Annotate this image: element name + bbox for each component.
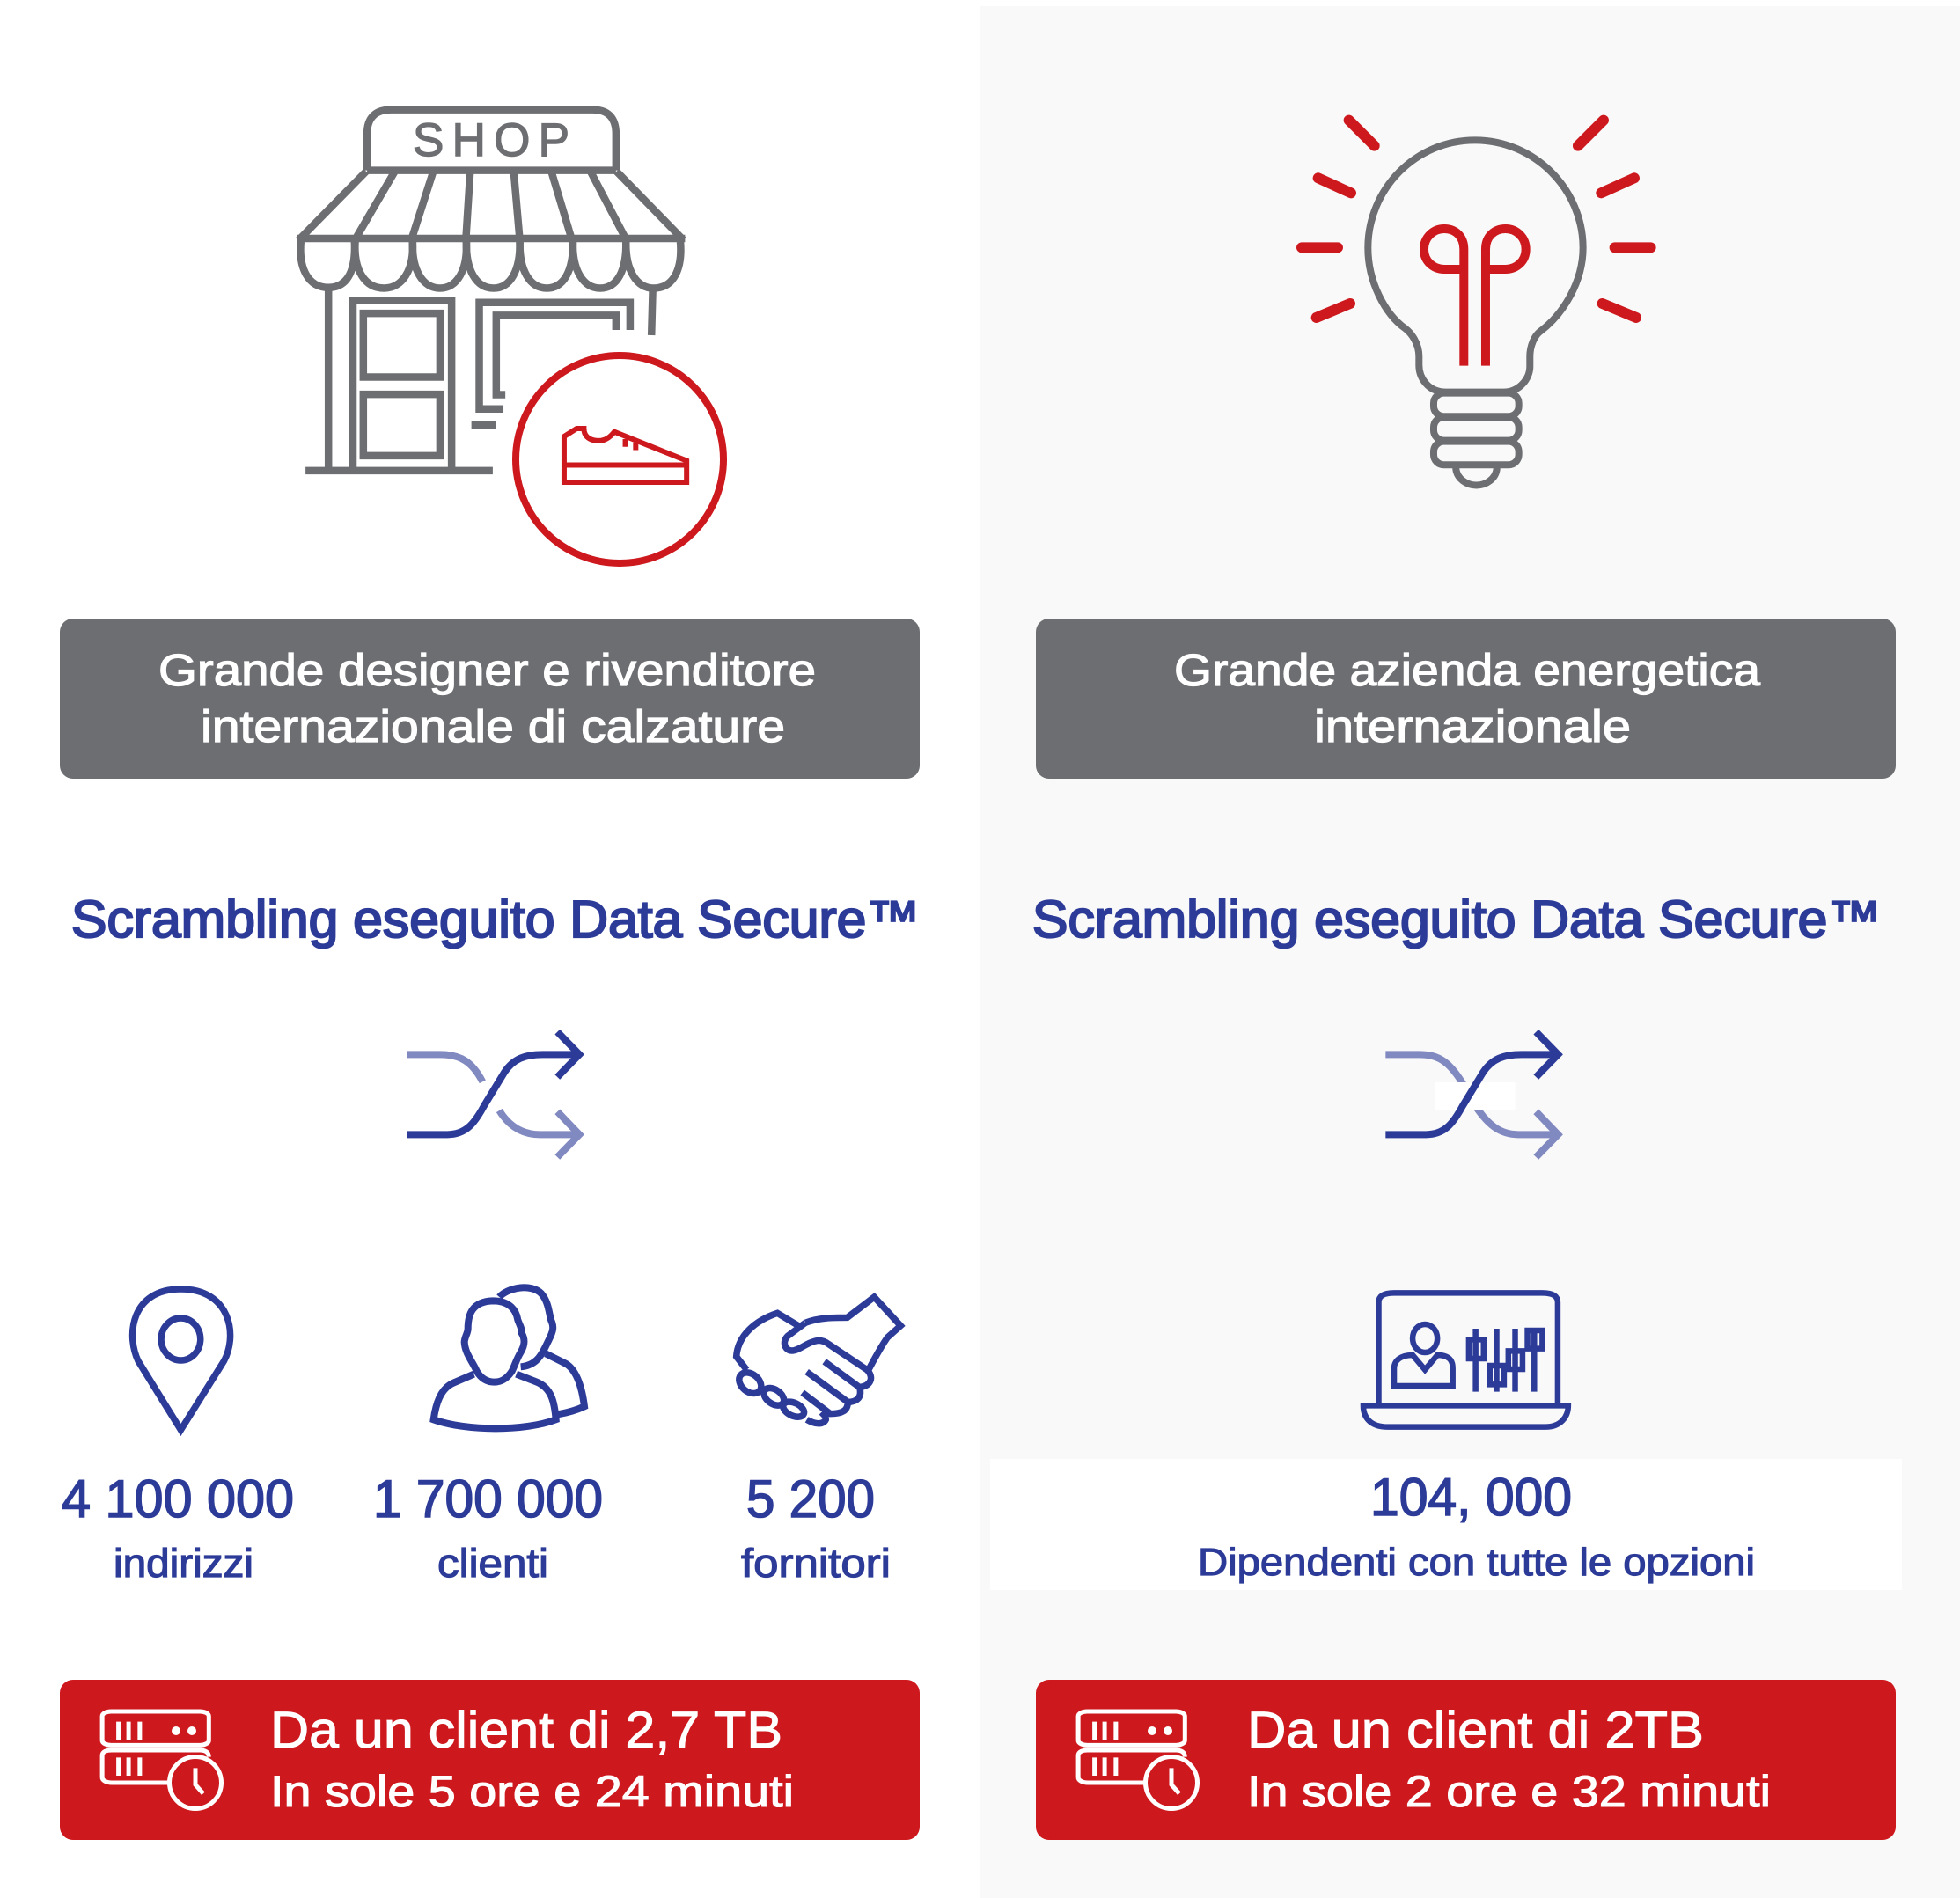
- stat: customers: 1 700 000: [373, 1469, 603, 1528]
- stat panel: employees: [990, 1459, 1902, 1590]
- stat: addresses: 4 100 000: [62, 1469, 294, 1528]
- panel: right result: [1036, 1680, 1896, 1840]
- panel: right result: In sole 2 ore e 32 minuti: [1247, 1767, 1771, 1816]
- icon: server with clock: [102, 1711, 222, 1809]
- panel: energy company background: [980, 6, 1960, 1898]
- icon: right shuffle arrows: [1385, 1032, 1558, 1157]
- stat: addresses: indirizzi: [114, 1541, 253, 1586]
- panel: left result: Da un client di 2,7 TB: [270, 1702, 782, 1759]
- heading: left scrambling: Scrambling eseguito Data Secure™: [71, 890, 920, 949]
- panel: left company label: [60, 619, 920, 779]
- panel: left company label: internazionale di calzature: [201, 701, 785, 751]
- panel: left result: In sole 5 ore e 24 minuti: [270, 1767, 794, 1816]
- stat: suppliers: fornitori: [741, 1541, 891, 1586]
- stat: customers: clienti: [437, 1541, 548, 1586]
- heading: right scrambling: Scrambling eseguito Data Secure™: [1032, 890, 1881, 949]
- icon: server with clock: [1078, 1711, 1197, 1809]
- panel: left result: [60, 1680, 920, 1840]
- stat: suppliers: [741, 1469, 891, 1586]
- icon: two people: [434, 1287, 584, 1428]
- icon: laptop with controls: [1363, 1293, 1568, 1427]
- icon: shop with shoe: [297, 110, 723, 563]
- stat panel: employees: 104, 000: [1370, 1468, 1572, 1527]
- icon: location pin: [133, 1289, 231, 1430]
- panel: right company label: Grande azienda energetica: [1174, 645, 1761, 695]
- icon: shop with shoe: SHOP: [413, 114, 569, 166]
- stat: addresses: [62, 1469, 294, 1586]
- panel: right company label: [1036, 619, 1896, 779]
- panel: right result: Da un client di 2TB: [1247, 1702, 1704, 1759]
- stat: customers: [373, 1469, 603, 1586]
- icon: light bulb: [1302, 121, 1651, 485]
- stat panel: employees: Dipendenti con tutte le opzioni: [1198, 1541, 1755, 1584]
- icon: handshake: [735, 1297, 900, 1424]
- panel: right company label: internazionale: [1314, 701, 1631, 751]
- panel: left company label: Grande designer e rivenditore: [158, 645, 816, 695]
- icon: left shuffle arrows: [407, 1032, 579, 1157]
- stat: suppliers: 5 200: [746, 1469, 875, 1528]
